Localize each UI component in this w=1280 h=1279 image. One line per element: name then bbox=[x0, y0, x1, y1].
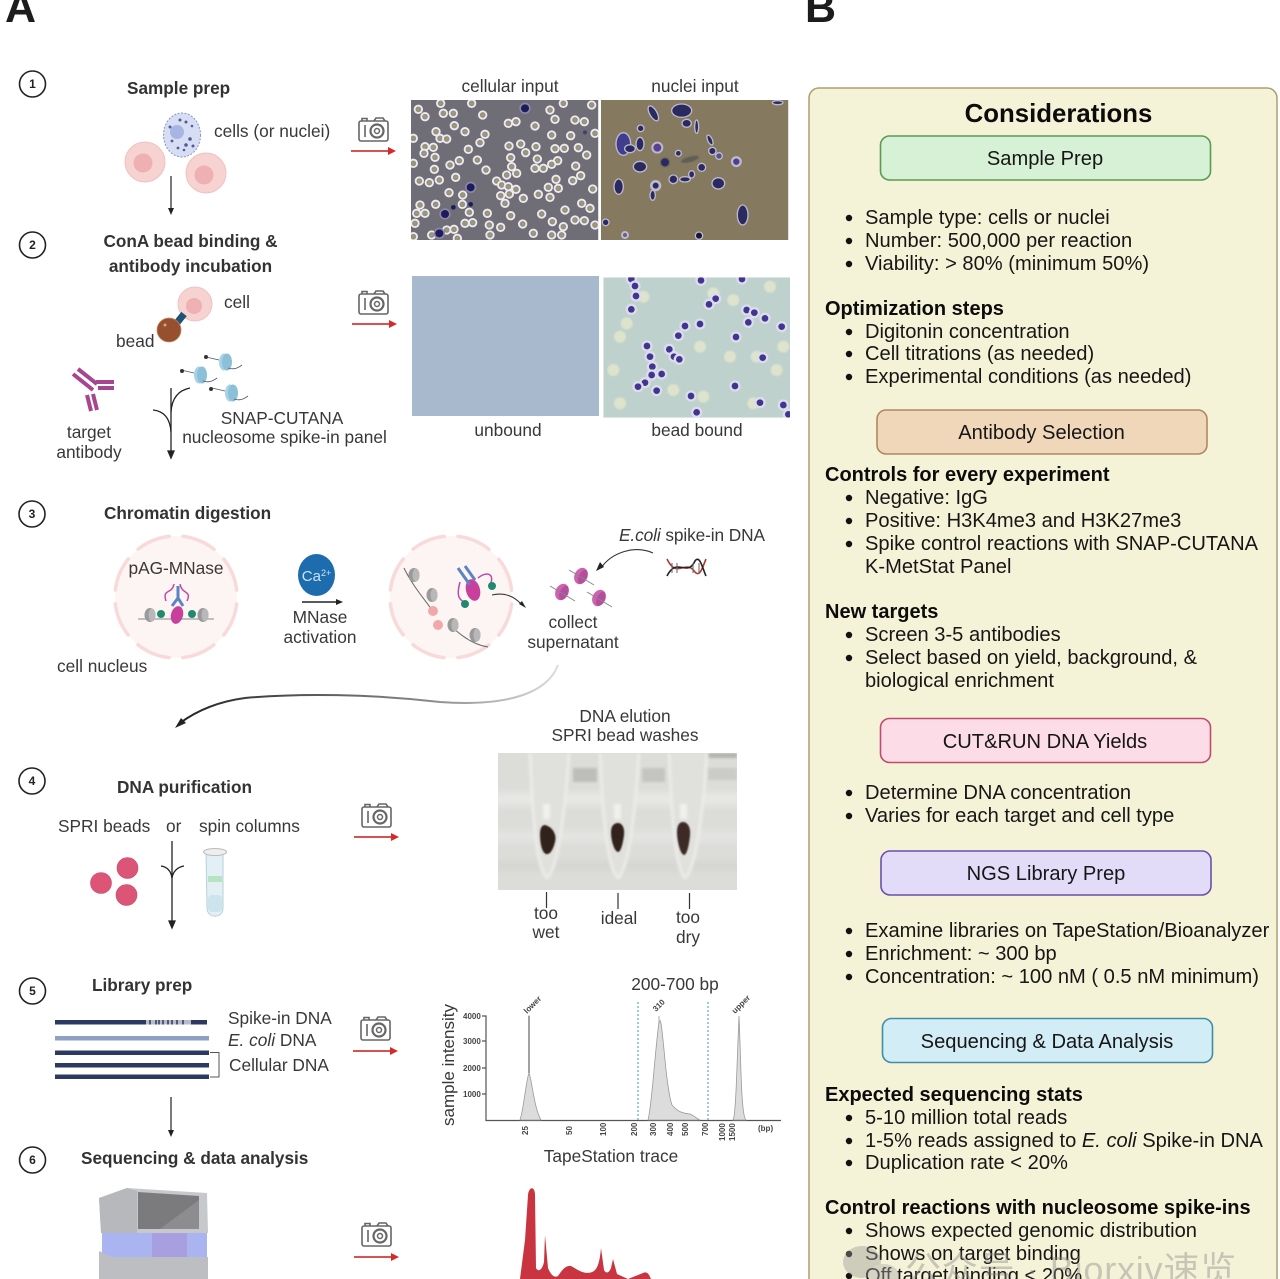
x tick labels: 50 bbox=[565, 1126, 574, 1135]
label: MNase activation: MNase bbox=[293, 607, 347, 627]
list: control reactions: Shows expected genomic distribution bbox=[865, 1220, 1197, 1242]
x tick labels: 700 bbox=[701, 1122, 710, 1136]
image labels: DNA elution bbox=[579, 706, 671, 726]
list: library prep bbox=[846, 920, 1270, 988]
list: controls: Controls for every experiment bbox=[825, 464, 1110, 486]
label: cells: cells (or nuclei) bbox=[214, 121, 330, 141]
pill: CUT&RUN DNA yields bbox=[880, 718, 1210, 762]
label: E. coli spike-in DNA: E.coli spike-in DNA bbox=[619, 525, 765, 545]
peak labels: upper bbox=[730, 993, 752, 1015]
panel A: workflow bbox=[19, 71, 794, 1279]
image labels: SPRI bead washes bbox=[552, 725, 699, 745]
label: pAG-MNase: pAG-MNase bbox=[128, 558, 224, 578]
step number 6: 6 bbox=[29, 1153, 36, 1167]
list: controls: Spike control reactions with SNAP-CUTANA bbox=[865, 533, 1259, 555]
pill: sequencing and data analysis bbox=[882, 1018, 1212, 1062]
list: library prep: Examine libraries on TapeStation/Bioanalyzer bbox=[865, 920, 1270, 942]
photo: SPRI bead tubes bbox=[490, 753, 745, 890]
icon: cells bbox=[125, 113, 226, 193]
panel B: considerations bbox=[809, 88, 1277, 1279]
icon: Ca2+ bbox=[298, 554, 335, 596]
step number 4: 4 bbox=[29, 774, 36, 788]
camera and red arrow bbox=[352, 291, 397, 328]
list: control reactions: Control reactions with nucleosome spike-ins bbox=[825, 1197, 1251, 1219]
micrograph: unbound bbox=[412, 276, 599, 416]
x tick labels: 1500 bbox=[728, 1123, 737, 1141]
heading: sequencing and data analysis: Sequencing & data analysis bbox=[81, 1148, 308, 1168]
panel background bbox=[809, 88, 1277, 1279]
DNA labels: Cellular DNA bbox=[229, 1055, 329, 1075]
heading: DNA purification: DNA purification bbox=[117, 777, 252, 797]
y ticks bbox=[463, 1012, 481, 1099]
DNA library bars bbox=[55, 1020, 219, 1079]
list: sample prep: Viability: > 80% (minimum 50%) bbox=[865, 253, 1149, 275]
labels: SPRI beads or spin columns: spin columns bbox=[199, 816, 300, 836]
list: optimization steps: Optimization steps bbox=[825, 298, 1004, 320]
camera and red arrow bbox=[354, 1223, 399, 1261]
list: yields bbox=[846, 782, 1174, 827]
list: controls: Positive: H3K4me3 and H3K27me3 bbox=[865, 510, 1181, 532]
pill: antibody selection: Antibody Selection bbox=[958, 422, 1125, 444]
list: optimization steps: Cell titrations (as needed) bbox=[865, 343, 1094, 365]
chart: red genome track bbox=[520, 1188, 651, 1279]
x tick labels bbox=[521, 1122, 773, 1141]
peak labels: lower bbox=[522, 994, 543, 1015]
icon: sequencer bbox=[99, 1188, 208, 1279]
title: considerations: Considerations bbox=[965, 100, 1152, 128]
icon: Ca2+: Ca bbox=[302, 568, 321, 585]
list: expected stats bbox=[825, 1084, 1264, 1174]
tapestation trace bbox=[439, 974, 781, 1166]
label: cell: cell bbox=[224, 292, 250, 312]
callout ticks and labels bbox=[532, 892, 700, 947]
image labels bbox=[552, 706, 699, 745]
list: expected stats: 1-5% reads assigned to E. coli Spike-in DNA bbox=[865, 1130, 1264, 1152]
x tick labels: 100 bbox=[599, 1122, 608, 1136]
cell nucleus before activation bbox=[115, 536, 237, 658]
DNA labels bbox=[228, 1008, 332, 1075]
image labels: bead bound bbox=[651, 420, 743, 440]
label: MNase activation bbox=[283, 607, 357, 647]
pill: sample prep bbox=[880, 136, 1210, 180]
list: expected stats: 5-10 million total reads bbox=[865, 1107, 1067, 1129]
list: expected stats: Expected sequencing stats bbox=[825, 1084, 1083, 1106]
label: MNase activation: activation bbox=[283, 627, 357, 647]
arrow down bbox=[168, 176, 174, 215]
step number 4 bbox=[19, 768, 45, 794]
list: new targets bbox=[825, 601, 1198, 692]
heading: ConA bead binding and antibody incubation: ConA bead binding & bbox=[103, 231, 278, 251]
heading: ConA bead binding and antibody incubation: antibody incubation bbox=[109, 256, 272, 276]
list: control reactions: Shows on target binding bbox=[865, 1243, 1081, 1265]
axes bbox=[482, 1016, 781, 1120]
icon: Ca2+: 2+ bbox=[321, 568, 331, 578]
x tick labels: 1000 bbox=[718, 1123, 727, 1141]
callout ticks and labels: too bbox=[676, 907, 700, 927]
list: optimization steps bbox=[825, 298, 1191, 388]
icon: cell bound to bead bbox=[157, 287, 212, 342]
label: target antibody: antibody bbox=[56, 442, 122, 462]
camera and red arrow bbox=[354, 804, 399, 841]
label: bead: bead bbox=[116, 331, 154, 351]
heading: chromatin digestion: Chromatin digestion bbox=[104, 503, 271, 523]
list: new targets: biological enrichment bbox=[865, 670, 1054, 692]
pill: sample prep: Sample Prep bbox=[987, 148, 1103, 170]
y ticks: 1000 bbox=[463, 1090, 481, 1099]
icon: target antibody bbox=[73, 369, 114, 411]
list: new targets: Screen 3-5 antibodies bbox=[865, 624, 1061, 646]
label: collect supernatant: supernatant bbox=[527, 632, 619, 652]
micrograph: bead bound bbox=[603, 273, 794, 420]
label: collect supernatant: collect bbox=[549, 612, 598, 632]
callout ticks and labels: too bbox=[534, 903, 558, 923]
arrow: MNase activation bbox=[302, 599, 343, 605]
image labels: cellular input bbox=[461, 76, 559, 96]
list: sample prep: Number: 500,000 per reaction bbox=[865, 230, 1132, 252]
y ticks: 2000 bbox=[463, 1064, 481, 1073]
arrow with branches bbox=[161, 841, 184, 928]
labels: SPRI beads or spin columns: or bbox=[166, 816, 182, 836]
image labels: unbound bbox=[474, 420, 542, 440]
DNA labels: E. coli DNA bbox=[228, 1030, 317, 1050]
step number 1 bbox=[20, 71, 46, 97]
step number 6 bbox=[20, 1147, 46, 1173]
peaks bbox=[520, 1016, 746, 1120]
label: target antibody: target bbox=[67, 422, 111, 442]
list: sample prep: Sample type: cells or nuclei bbox=[865, 207, 1110, 229]
size range markers bbox=[638, 1002, 708, 1120]
icon: spike-in nucleosomes bbox=[180, 354, 248, 402]
arrow with branches bbox=[153, 388, 190, 458]
heading: library prep: Library prep bbox=[92, 975, 192, 995]
list: yields: Varies for each target and cell type bbox=[865, 805, 1174, 827]
cell nucleus after activation bbox=[390, 536, 526, 658]
x tick labels: 400 bbox=[666, 1122, 675, 1136]
heading: sample prep: Sample prep bbox=[127, 78, 230, 98]
list: optimization steps: Experimental conditions (as needed) bbox=[865, 366, 1191, 388]
step number 1: 1 bbox=[29, 77, 36, 91]
micrograph: cellular input bbox=[409, 99, 600, 243]
step number 5: 5 bbox=[29, 984, 36, 998]
pill: NGS library prep: NGS Library Prep bbox=[967, 863, 1125, 885]
callout ticks and labels: wet bbox=[532, 922, 560, 942]
curved arrow to supernatant bbox=[596, 550, 653, 571]
list: sample prep bbox=[846, 207, 1149, 275]
y ticks: 3000 bbox=[463, 1037, 481, 1046]
heading: ConA bead binding and antibody incubation bbox=[103, 231, 278, 276]
image labels: nuclei input bbox=[651, 76, 739, 96]
list: control reactions bbox=[825, 1197, 1251, 1279]
step 5: library prep bbox=[20, 974, 781, 1166]
callout ticks and labels: dry bbox=[676, 927, 700, 947]
step number 3: 3 bbox=[29, 507, 36, 521]
label: SNAP-CUTANA panel: nucleosome spike-in panel bbox=[182, 427, 387, 447]
list: controls bbox=[825, 464, 1259, 578]
x tick labels: (bp) bbox=[758, 1124, 773, 1133]
step 6: sequencing and data analysis bbox=[20, 1147, 651, 1279]
x tick labels: 500 bbox=[681, 1122, 690, 1136]
pill: CUT&RUN DNA yields: CUT&RUN DNA Yields bbox=[943, 731, 1147, 753]
x tick labels: 200 bbox=[630, 1122, 639, 1136]
step 4: DNA purification bbox=[19, 706, 745, 947]
image labels bbox=[474, 420, 743, 440]
label: collect supernatant bbox=[527, 612, 619, 652]
pill: sequencing and data analysis: Sequencing & Data Analysis bbox=[921, 1031, 1173, 1053]
camera and red arrow bbox=[353, 1017, 398, 1055]
image labels bbox=[461, 76, 739, 96]
label: TapeStation trace: TapeStation trace bbox=[544, 1146, 678, 1166]
list: optimization steps: Digitonin concentration bbox=[865, 321, 1070, 343]
callout ticks and labels: ideal bbox=[601, 908, 637, 928]
camera and red arrow bbox=[351, 118, 396, 155]
label: SNAP-CUTANA panel: SNAP-CUTANA bbox=[221, 408, 344, 428]
label: 200-700 bp: 200-700 bp bbox=[631, 974, 719, 994]
supernatant nucleosomes bbox=[550, 566, 612, 608]
label: cell nucleus: cell nucleus bbox=[57, 656, 148, 676]
label: target antibody bbox=[56, 422, 122, 462]
x tick labels: 25 bbox=[521, 1126, 530, 1135]
list: controls: K-MetStat Panel bbox=[865, 556, 1011, 578]
list: new targets: Select based on yield, background, & bbox=[865, 647, 1198, 669]
list: controls: Negative: IgG bbox=[865, 487, 988, 509]
step number 2: 2 bbox=[29, 238, 36, 252]
peak labels: 310 bbox=[651, 997, 667, 1013]
arrow down bbox=[168, 1097, 174, 1137]
DNA labels: Spike-in DNA bbox=[228, 1008, 332, 1028]
x tick labels: 300 bbox=[649, 1122, 658, 1136]
step 2: ConA bead binding bbox=[20, 231, 794, 462]
icon: spin column bbox=[204, 848, 226, 916]
peak labels bbox=[522, 993, 752, 1015]
step 3: chromatin digestion bbox=[19, 501, 765, 728]
y ticks: 4000 bbox=[463, 1012, 481, 1021]
list: expected stats: Duplication rate < 20% bbox=[865, 1152, 1068, 1174]
y axis label: sample intensity bbox=[439, 1004, 458, 1126]
label: SNAP-CUTANA panel bbox=[182, 408, 387, 447]
step number 2 bbox=[20, 232, 46, 258]
step number 3 bbox=[19, 501, 45, 527]
list: library prep: Enrichment: ~ 300 bp bbox=[865, 943, 1057, 965]
step 1: sample prep bbox=[20, 71, 788, 243]
list: library prep: Concentration: ~ 100 nM ( 0.5 nM minimum) bbox=[865, 966, 1259, 988]
step number 5 bbox=[20, 978, 46, 1004]
pill: NGS library prep bbox=[881, 851, 1211, 895]
icon: DNA helix bbox=[667, 559, 706, 576]
pill: antibody selection bbox=[877, 410, 1207, 454]
list: new targets: New targets bbox=[825, 601, 938, 623]
micrograph: nuclei input bbox=[601, 100, 788, 240]
list: yields: Determine DNA concentration bbox=[865, 782, 1131, 804]
long curved arrow to step 4 bbox=[175, 665, 558, 728]
labels: SPRI beads or spin columns: SPRI beads bbox=[58, 816, 151, 836]
icon: SPRI beads bbox=[90, 858, 138, 906]
labels: SPRI beads or spin columns bbox=[58, 816, 300, 836]
